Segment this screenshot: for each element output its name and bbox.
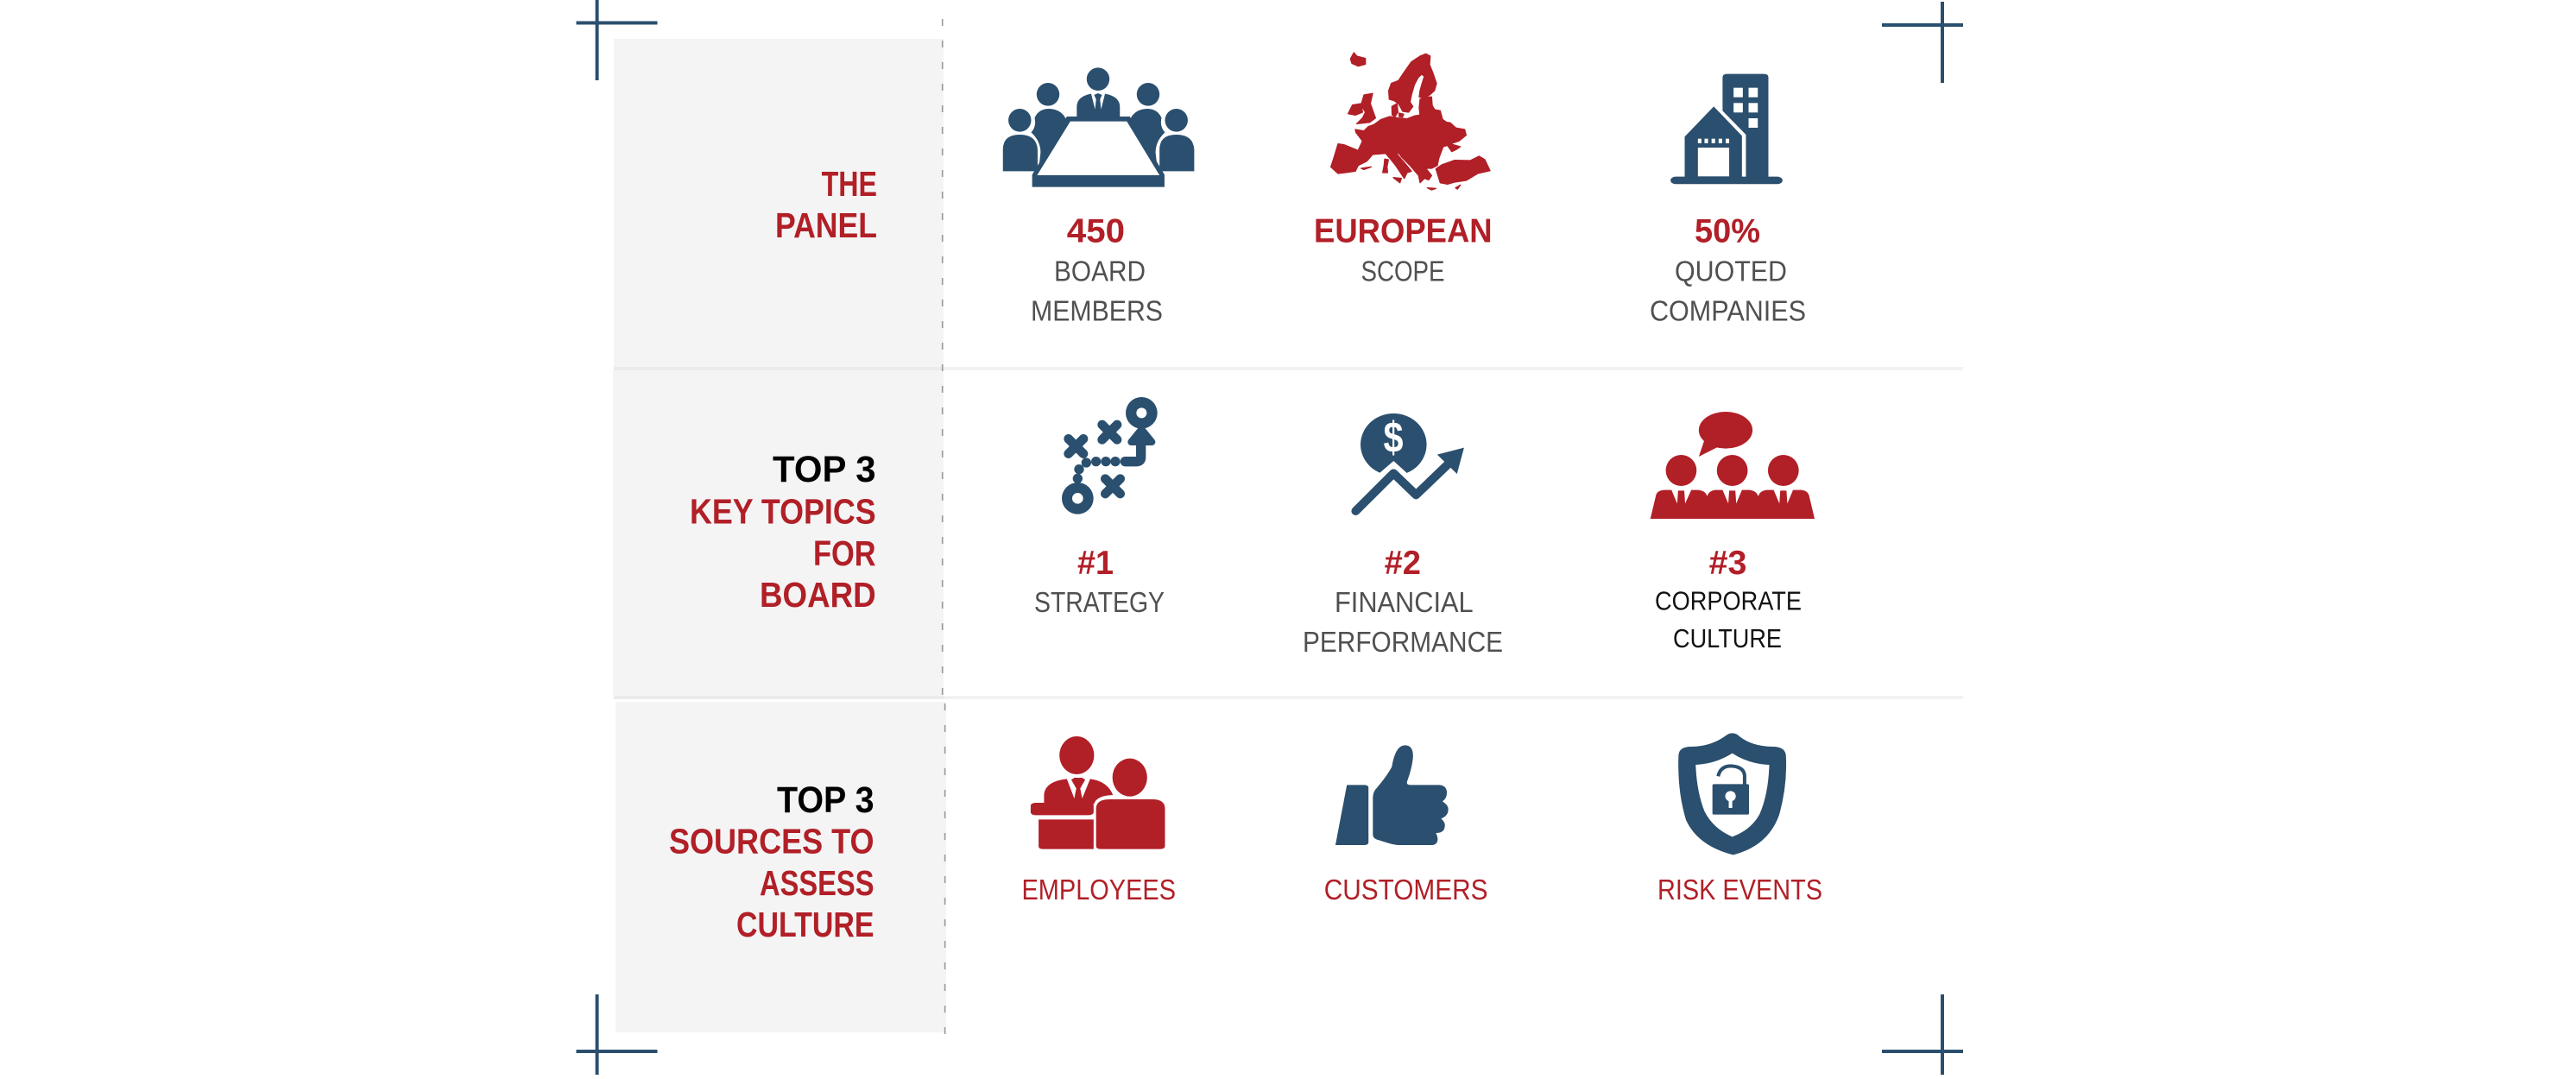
crop mark: bottom right (1882, 994, 1963, 1075)
stat: 50% quoted companies: COMPANIES (1650, 296, 1806, 328)
heading: top 3 sources to assess culture: CULTURE (736, 905, 874, 944)
heading: the panel (775, 164, 877, 245)
icon: board meeting (1003, 67, 1194, 187)
panel: top 3 sources to assess culture (616, 702, 1822, 1032)
stat: 450 board members: 450 (1067, 212, 1125, 250)
crop mark: top left (577, 0, 658, 80)
icon: dollar coin with rising arrow: $ (1383, 413, 1404, 462)
topic 2: financial performance: PERFORMANCE (1303, 627, 1503, 659)
stat: 450 board members (1031, 212, 1163, 328)
heading: top 3 key topics for board: FOR (813, 533, 876, 573)
heading: top 3 key topics for board (690, 449, 876, 615)
grey heading band, row 2 (613, 370, 944, 696)
panel: top 3 key topics (613, 370, 1815, 696)
topic 2: financial performance (1303, 545, 1503, 659)
topic 1: strategy (1034, 545, 1165, 619)
stat: 50% quoted companies: QUOTED (1675, 256, 1787, 288)
heading: the panel: THE (822, 164, 877, 204)
icon: map of Europe (1331, 53, 1490, 190)
stat: European scope: EUROPEAN (1314, 212, 1493, 250)
stat: 450 board members: BOARD (1054, 256, 1146, 288)
topic 1: strategy: #1 (1077, 545, 1114, 582)
topic 1: strategy: STRATEGY (1034, 587, 1165, 619)
stat: 50% quoted companies: 50% (1695, 212, 1760, 250)
icon: dollar coin with rising arrow (1355, 413, 1464, 511)
label: risk events: RISK EVENTS (1657, 874, 1822, 905)
topic 3: corporate culture (1655, 545, 1802, 653)
stat: 50% quoted companies (1650, 212, 1806, 328)
topic 3: corporate culture: CULTURE (1673, 623, 1782, 653)
heading: the panel: PANEL (775, 205, 877, 245)
grey heading band, row 1 (614, 39, 944, 367)
heading: top 3 key topics for board: KEY TOPICS (690, 492, 876, 532)
heading: top 3 sources to assess culture: TOP 3 (777, 779, 874, 821)
panel: the panel (614, 39, 1806, 367)
heading: top 3 sources to assess culture: ASSESS (760, 863, 874, 903)
topic 3: corporate culture: CORPORATE (1655, 586, 1802, 616)
crop mark: bottom left (577, 994, 658, 1075)
icon: strategy play diagram (1062, 397, 1158, 514)
icon: company buildings (1670, 74, 1783, 184)
icon: people talking with speech bubble (1651, 412, 1815, 519)
icon: shield with open padlock (1678, 733, 1786, 855)
stat: European scope (1314, 212, 1493, 288)
grey heading band, row 3 (616, 702, 946, 1032)
topic 2: financial performance: FINANCIAL (1335, 587, 1474, 619)
heading: top 3 sources to assess culture (669, 779, 874, 944)
icon: thumbs up (1335, 745, 1449, 845)
heading: top 3 sources to assess culture: SOURCES TO (669, 822, 874, 861)
crop mark: top right (1882, 2, 1963, 83)
heading: top 3 key topics for board: TOP 3 (773, 449, 876, 490)
heading: top 3 key topics for board: BOARD (760, 575, 876, 615)
topic 3: corporate culture: #3 (1709, 545, 1747, 582)
topic 2: financial performance: #2 (1385, 545, 1421, 582)
icon: employees at desk (1031, 736, 1165, 849)
label: customers: CUSTOMERS (1324, 874, 1488, 905)
label: employees: EMPLOYEES (1022, 874, 1176, 905)
stat: European scope: SCOPE (1361, 256, 1445, 288)
stat: 450 board members: MEMBERS (1031, 296, 1163, 328)
